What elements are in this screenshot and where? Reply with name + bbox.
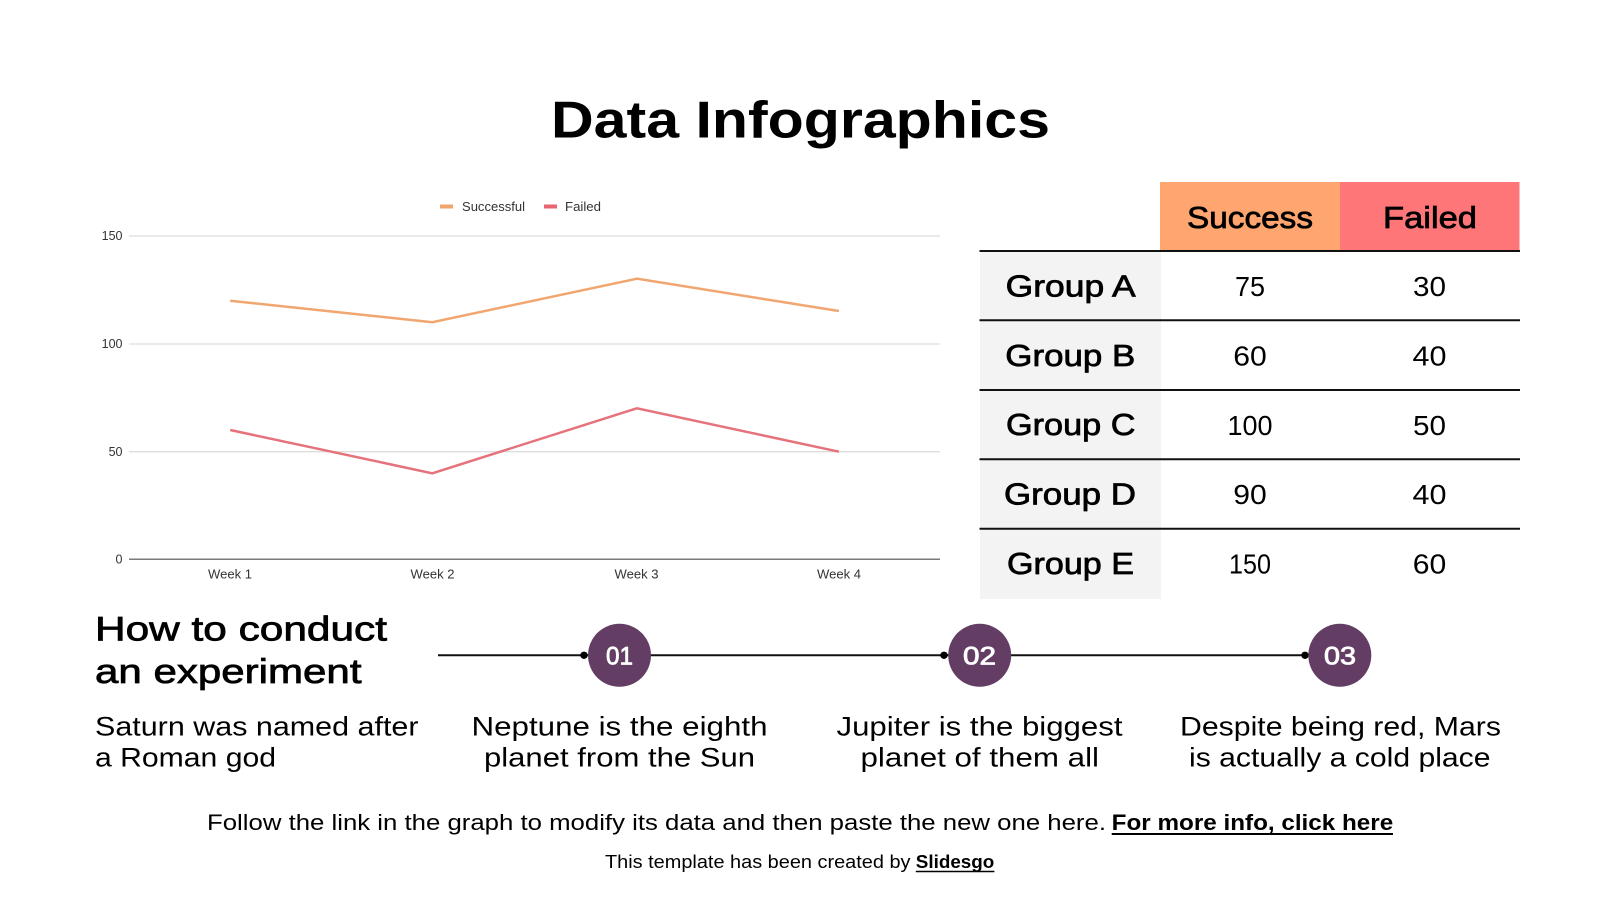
row: Group A: 75 [1235,271,1265,302]
x axis labels: Week 4 [817,568,861,582]
description: step 02: Jupiter is the biggest [836,712,1123,742]
step 03 marker [1301,624,1371,687]
y axis labels: 150 [102,229,123,243]
credit line: Slidesgo [916,852,994,872]
row: Group E: 150 [1229,548,1271,580]
description: step 01: Neptune is the eighth [472,712,768,742]
chart legend: Failed [565,200,601,214]
step 02 marker [940,624,1011,687]
y axis labels: 100 [102,337,123,351]
x axis labels [208,568,861,582]
credit line: This template has been created by [605,852,910,872]
row: Group C: 50 [1413,410,1446,441]
row: Group C: Group C [1006,407,1136,442]
line: failed [230,408,839,473]
description: step 03: is actually a cold place [1189,742,1490,772]
chart legend: Successful [462,200,525,214]
table header: success [1160,182,1340,251]
row: Group A: Group A [1006,268,1136,304]
row: Group B [1005,338,1446,373]
table header: failed: Failed [1383,200,1477,235]
x axis labels: Week 3 [614,568,659,582]
x axis labels: Week 2 [410,568,455,582]
row: Group B: 40 [1412,340,1446,372]
footnote: data link: Follow the link in the graph to modify its data and then paste the new one here. [207,810,1106,835]
description: step 03 [1180,712,1501,772]
data table [980,182,1520,599]
step 01 marker [580,624,651,687]
table header: success: Success [1187,200,1313,235]
row: Group E: 60 [1413,548,1446,580]
step 01 marker: 01 [606,642,633,670]
row: Group E [1007,546,1446,581]
row: Group D: Group D [1004,476,1136,512]
x axis labels: Week 1 [208,568,252,582]
heading: how to conduct an experiment: an experiment [95,653,362,691]
line chart [102,200,940,582]
description: step 01: planet from the Sun [484,742,755,772]
row: Group D [1004,476,1446,512]
row: Group A: 30 [1413,271,1446,302]
row: Group A [1006,268,1446,304]
line: successful [230,279,839,322]
heading: how to conduct an experiment [95,610,388,691]
row: Group B: 60 [1233,340,1267,372]
footnote: data link [207,810,1393,835]
description: step 02: planet of them all [860,742,1099,772]
y axis labels [102,229,123,566]
description: intro: a Roman god [95,742,276,772]
row: Group E: Group E [1007,546,1134,581]
row: Group D: 40 [1412,479,1446,510]
description: intro: Saturn was named after [95,712,419,742]
description: intro [95,712,419,772]
table header: failed [1340,182,1520,251]
y axis labels: 50 [109,445,123,459]
row: Group C [1006,407,1446,442]
y axis labels: 0 [116,552,123,566]
title: Data Infographics [551,92,1050,150]
row: Group C: 100 [1228,410,1272,441]
row: Group D: 90 [1233,479,1267,510]
timeline [438,624,1371,687]
step 02 marker: 02 [963,642,996,670]
chart legend [440,200,601,214]
description: step 01 [472,712,768,772]
footnote: data link: For more info, click here [1112,810,1393,835]
description: step 02 [836,712,1123,772]
heading: how to conduct an experiment: How to conduct [95,610,388,648]
row: Group B: Group B [1005,338,1135,373]
description: step 03: Despite being red, Mars [1180,712,1501,742]
step 03 marker: 03 [1324,642,1356,670]
